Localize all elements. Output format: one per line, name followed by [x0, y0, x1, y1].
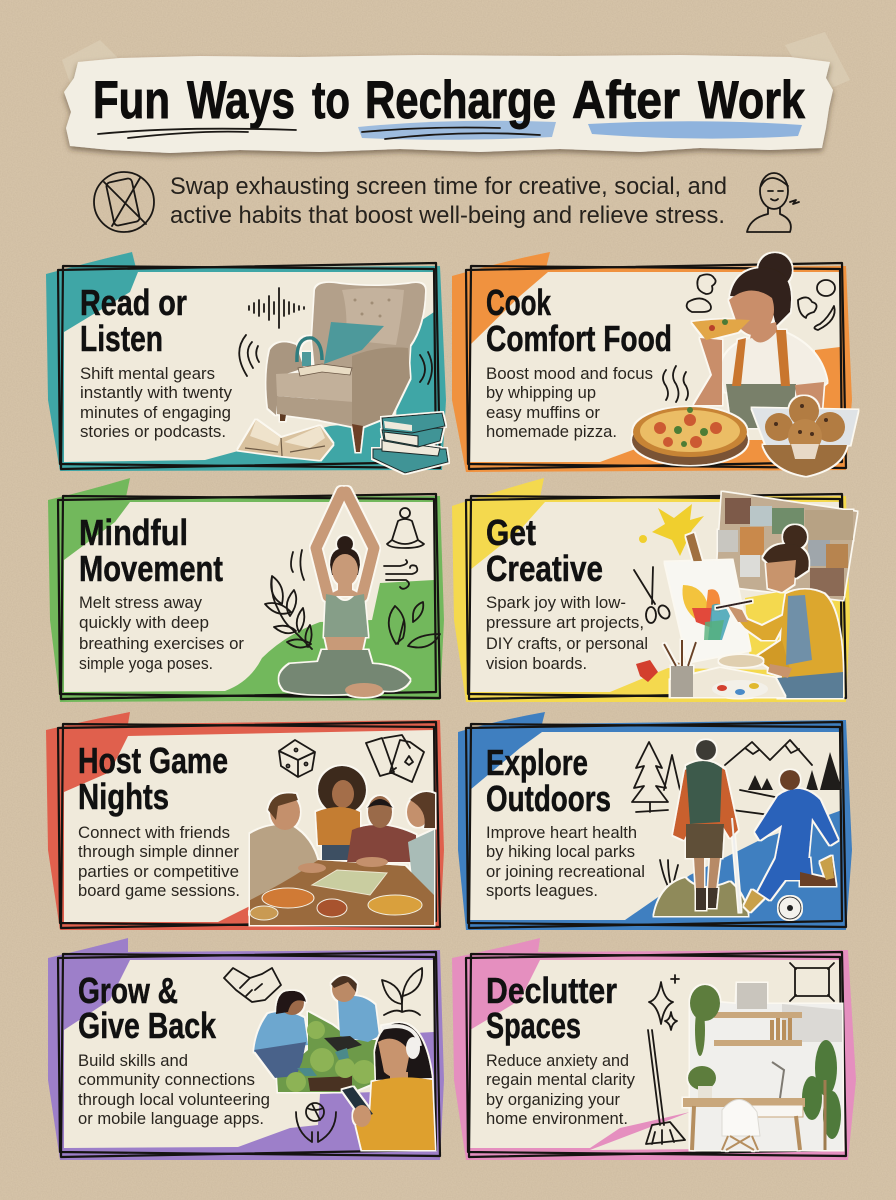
body text — [78, 824, 240, 900]
muffin basket — [752, 396, 858, 476]
paint backing — [46, 252, 446, 471]
cream card — [470, 732, 842, 920]
heading: Listen — [80, 318, 163, 359]
icon: relaxed person — [747, 173, 799, 232]
body text: by organizing your — [486, 1091, 621, 1109]
panel: host game nights — [46, 712, 444, 930]
sketch frame — [58, 952, 440, 1157]
body text — [486, 1052, 636, 1128]
cream card — [470, 502, 840, 692]
cream card — [470, 960, 842, 1150]
body text — [486, 365, 653, 441]
sketch frame — [466, 494, 846, 699]
panel: get creative — [452, 478, 857, 702]
blue brush strokes — [358, 121, 802, 140]
title text: Recharge — [365, 71, 556, 130]
cream card — [64, 730, 434, 922]
heading: Nights — [78, 776, 169, 817]
heading — [79, 512, 223, 589]
hand-drawn underlines — [98, 128, 540, 139]
title banner — [62, 32, 850, 153]
heading — [486, 742, 611, 819]
body text: through simple dinner — [78, 843, 240, 861]
body text: home environment. — [486, 1110, 628, 1128]
title text: Work — [698, 71, 805, 130]
tidy room with desk — [683, 983, 843, 1150]
heading — [80, 282, 187, 359]
yellow and red paint splats — [636, 504, 704, 682]
heading: Grow & — [78, 970, 178, 1011]
heading: Creative — [486, 548, 603, 589]
body text: Spark joy with low- — [486, 594, 626, 612]
sketch frame — [466, 263, 846, 469]
heading — [78, 740, 228, 817]
heading: Explore — [486, 742, 588, 783]
heading — [486, 282, 672, 359]
icon: sparkles, frame, broom — [646, 963, 834, 1144]
paint backing — [452, 938, 856, 1160]
body text: Improve heart health — [486, 824, 637, 842]
heading: Mindful — [79, 512, 188, 553]
panel: declutter spaces — [452, 938, 856, 1160]
body text: parties or competitive — [78, 863, 239, 881]
title text: Ways — [187, 71, 295, 130]
paint backing — [46, 712, 444, 930]
cream card — [64, 960, 434, 1148]
body text: minutes of engaging — [80, 404, 231, 422]
paint backing — [452, 252, 852, 472]
body text: by whipping up — [486, 384, 596, 402]
body text — [486, 594, 648, 673]
icon: sound waves — [239, 288, 432, 384]
icon: dice and cards — [279, 735, 424, 782]
body text: Boost mood and focus — [486, 365, 653, 383]
body text: community connections — [78, 1071, 255, 1089]
body text — [486, 824, 645, 900]
body text: sports leagues. — [486, 882, 598, 900]
panel: grow and give back — [48, 938, 444, 1160]
body text — [79, 594, 245, 673]
open book — [238, 420, 333, 460]
hiker — [673, 740, 740, 912]
painting woman — [716, 525, 843, 698]
paint backing — [48, 478, 444, 702]
body text: homemade pizza. — [486, 423, 617, 441]
rock — [654, 878, 748, 916]
cream card — [64, 502, 434, 692]
heading: Movement — [79, 548, 223, 589]
palette and brush jar — [664, 640, 785, 698]
icon: doodles and steam — [663, 274, 835, 402]
heading: Outdoors — [486, 778, 611, 819]
body text: board game sessions. — [78, 882, 240, 900]
sketch frame — [466, 952, 846, 1157]
body text: DIY crafts, or personal — [486, 635, 648, 653]
tape strips — [62, 32, 850, 100]
heading: Spaces — [486, 1005, 581, 1046]
icon: meditation, wind and leaves — [265, 508, 440, 649]
heading: Read or — [80, 282, 187, 323]
heading: Comfort Food — [486, 318, 672, 359]
title text: Fun — [93, 71, 170, 130]
pizza — [632, 407, 748, 465]
paint backing — [458, 712, 852, 930]
icon: trees and mountains — [632, 740, 812, 890]
body text: Shift mental gears — [80, 365, 215, 383]
woman with headphones and phone — [342, 1023, 435, 1150]
heading — [486, 970, 617, 1046]
easel and canvas — [665, 533, 750, 678]
body text: quickly with deep — [79, 614, 209, 632]
panel: read or listen — [46, 252, 448, 473]
friends around table — [250, 766, 435, 925]
heading: Give Back — [78, 1005, 217, 1046]
body text: or joining recreational — [486, 863, 645, 881]
body text: Melt stress away — [79, 594, 203, 612]
panel: explore outdoors — [458, 712, 852, 930]
body text: by hiking local parks — [486, 843, 635, 861]
icon: no phone — [94, 172, 154, 232]
heading — [78, 970, 217, 1046]
cream card — [470, 272, 840, 462]
torn paper — [64, 55, 833, 153]
body text: stories or podcasts. — [80, 423, 226, 441]
soccer ball — [779, 897, 801, 919]
body text: simple yoga poses. — [79, 655, 213, 673]
soccer player — [744, 770, 838, 912]
woman eating pizza — [692, 253, 827, 428]
icon: scissors — [634, 567, 672, 623]
heading — [486, 512, 603, 589]
panel: mindful movement — [48, 478, 444, 702]
body text: breathing exercises or — [79, 635, 245, 653]
body text: easy muffins or — [486, 404, 601, 422]
body text — [80, 365, 233, 441]
title text: After — [572, 71, 680, 130]
photo collage — [716, 492, 857, 600]
panel: cook comfort food — [452, 252, 858, 476]
icon: handshake, sprout, hands with globe — [224, 968, 422, 1142]
yoga woman — [279, 492, 410, 697]
body text: Reduce anxiety and — [486, 1052, 629, 1070]
body text: Connect with friends — [78, 824, 230, 842]
body text: pressure art projects, — [486, 614, 644, 632]
subtitle: Swap exhausting screen time for creative, social, and — [170, 173, 727, 200]
body text: or mobile language apps. — [78, 1110, 264, 1128]
body text: instantly with twenty — [80, 384, 233, 402]
volunteers gardening photo — [254, 976, 379, 1092]
heading: Cook — [486, 282, 552, 323]
body text: vision boards. — [486, 655, 587, 673]
sketch frame — [58, 722, 440, 928]
paint backing — [452, 478, 850, 702]
sketch frame — [58, 263, 440, 469]
body text — [78, 1052, 270, 1128]
sketch frame — [58, 494, 440, 699]
book stack — [373, 413, 448, 473]
title text: to — [312, 71, 350, 130]
sketch frame — [466, 722, 846, 928]
cream card — [64, 272, 434, 462]
paint backing — [48, 938, 444, 1160]
armchair illustration — [266, 283, 425, 452]
heading: Host Game — [78, 740, 228, 781]
title text — [93, 71, 805, 130]
body text: through local volunteering — [78, 1091, 270, 1109]
heading: Get — [486, 512, 536, 553]
body text: regain mental clarity — [486, 1071, 636, 1089]
yellow patch behind painter — [745, 590, 790, 662]
subtitle: active habits that boost well-being and relieve stress. — [170, 202, 725, 229]
subtitle — [170, 173, 727, 229]
heading: Declutter — [486, 970, 617, 1011]
body text: Build skills and — [78, 1052, 188, 1070]
